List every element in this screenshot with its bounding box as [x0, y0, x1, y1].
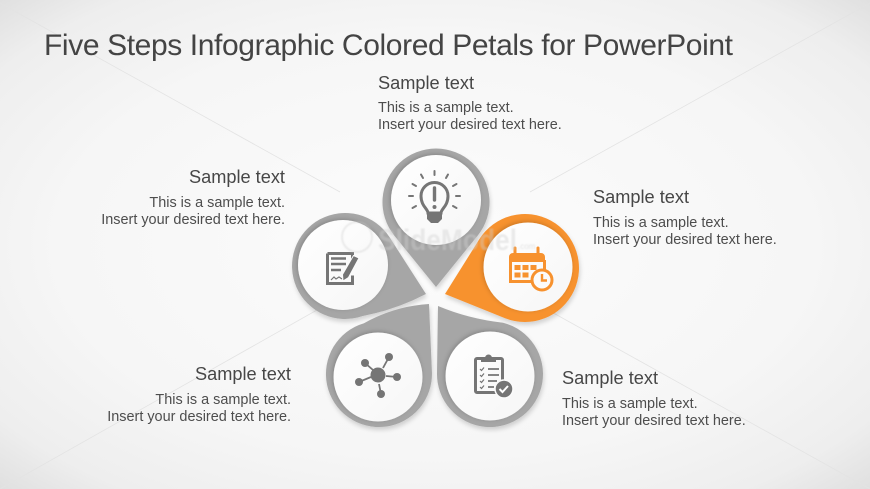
text block: lower left step: Insert your desired text here.: [107, 409, 291, 425]
text block: lower right step: [562, 368, 746, 429]
text block: upper left step: [101, 167, 285, 228]
icon: light bulb: [409, 171, 460, 223]
text block: upper left step: Insert your desired text here.: [101, 212, 285, 228]
petal: lower left, network: [326, 304, 432, 427]
text block: upper left step: This is a sample text.: [149, 195, 285, 211]
text block: upper left step: Sample text: [189, 167, 285, 187]
text block: lower left step: Sample text: [195, 364, 291, 384]
text block: lower left step: [107, 364, 291, 425]
text block: upper right step: Sample text: [593, 187, 689, 207]
icon: document with pencil: [328, 254, 359, 284]
petal: upper right, schedule (highlighted orange): [445, 214, 579, 322]
petal: left, writing: [292, 213, 426, 319]
watermark: .com: [518, 242, 536, 251]
text block: upper right step: [593, 187, 777, 248]
text block: lower left step: This is a sample text.: [155, 392, 291, 408]
icon: hub network: [355, 353, 401, 398]
text block: lower right step: Insert your desired text here.: [562, 413, 746, 429]
text block: lower right step: This is a sample text.: [562, 396, 698, 412]
icon: calendar with clock: [509, 248, 552, 290]
petal: lower right, checklist: [437, 306, 543, 427]
icon: clipboard with check badge: [476, 355, 513, 398]
title: Five Steps Infographic Colored Petals for PowerPoint: [44, 29, 734, 62]
text block: upper right step: This is a sample text.: [593, 215, 729, 231]
text block: upper right step: Insert your desired text here.: [593, 232, 777, 248]
watermark: SlideModel: [378, 224, 517, 257]
text block: lower right step: Sample text: [562, 368, 658, 388]
text block: top step: Sample text: [378, 73, 474, 93]
text block: top step: [378, 73, 562, 133]
petal: top, idea: [382, 149, 489, 287]
text block: top step: This is a sample text.: [378, 100, 514, 116]
text block: top step: Insert your desired text here.: [378, 117, 562, 133]
